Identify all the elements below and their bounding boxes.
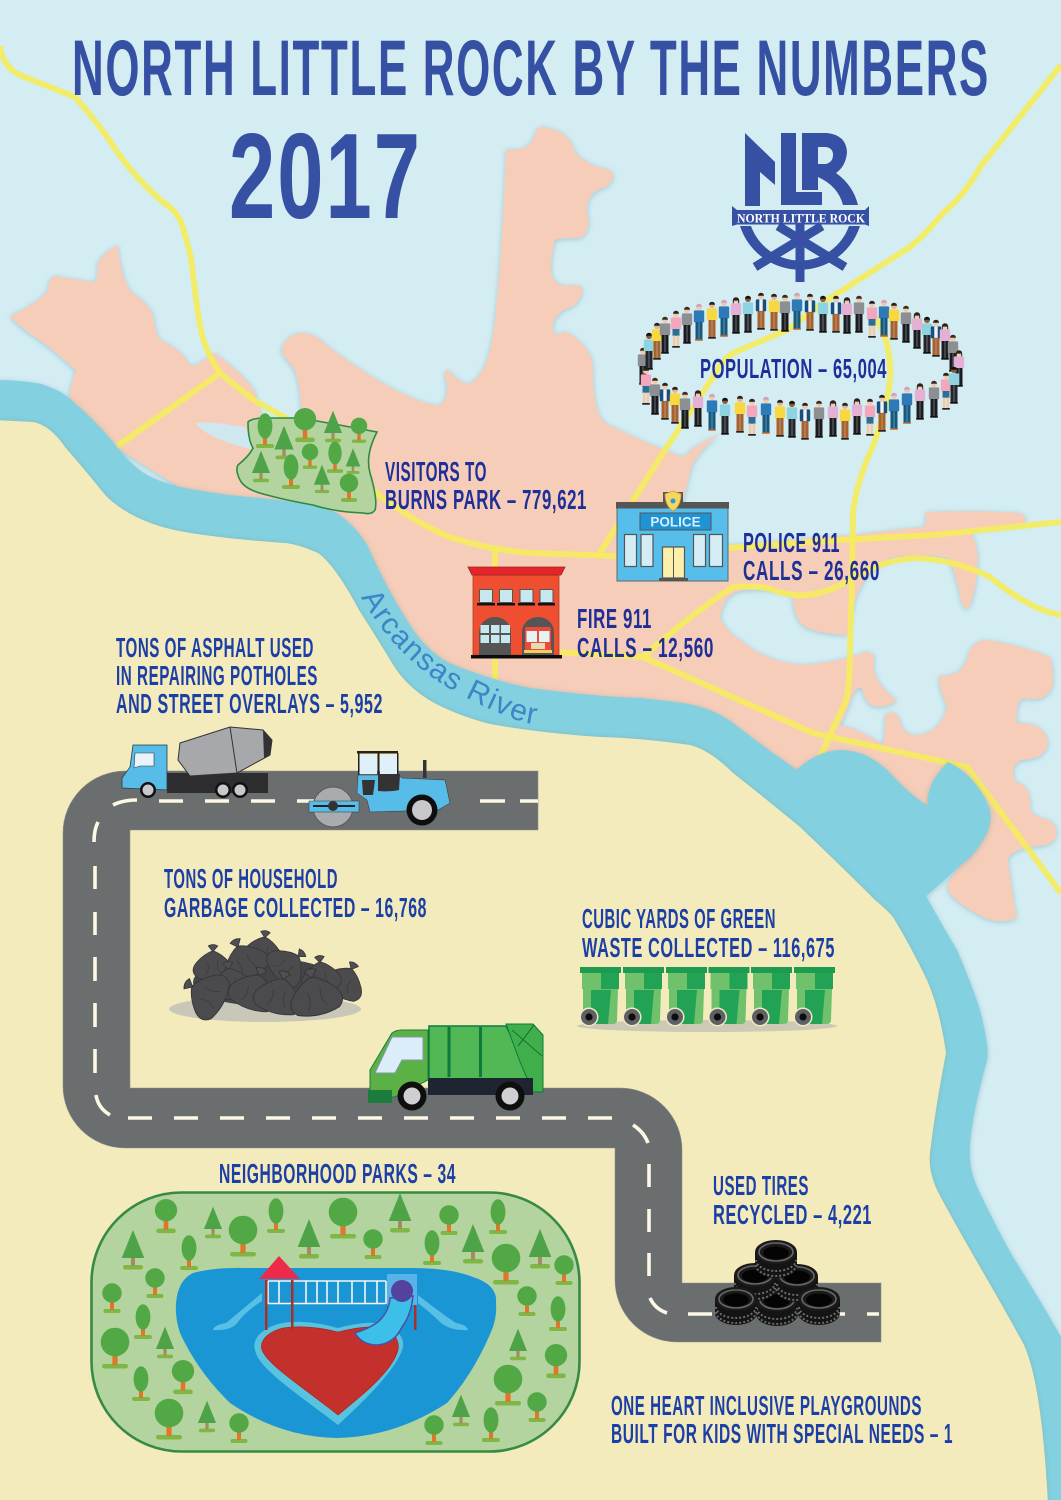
park trees bbox=[101, 1193, 574, 1445]
text: one heart playgrounds bbox=[611, 1390, 953, 1449]
road lane dashes bbox=[94, 800, 879, 1314]
text: visitors to Burns Park bbox=[385, 456, 587, 515]
text: used tires: RECYCLED – 4,221 bbox=[713, 1199, 872, 1230]
icon: green waste bins bbox=[577, 967, 837, 1032]
text: tons of asphalt: IN REPAIRING POTHOLES bbox=[116, 660, 318, 691]
text: police 911 calls: CALLS – 26,660 bbox=[743, 555, 880, 586]
red heart bbox=[261, 1327, 398, 1415]
map: North Little Rock land area bbox=[10, 126, 1057, 921]
icon: road roller bbox=[309, 751, 450, 827]
text: tons of asphalt bbox=[116, 632, 383, 719]
text: green waste bbox=[582, 903, 835, 963]
text: household garbage bbox=[164, 863, 427, 923]
logo: North Little Rock bbox=[732, 133, 869, 282]
text: police 911 calls bbox=[743, 527, 880, 586]
text: green waste: WASTE COLLECTED – 116,675 bbox=[582, 932, 835, 963]
text: used tires bbox=[713, 1170, 872, 1230]
text: population: POPULATION – 65,004 bbox=[700, 353, 887, 384]
text: fire 911 calls: FIRE 911 bbox=[577, 603, 652, 634]
map: small inlet bbox=[196, 423, 255, 450]
text: household garbage: TONS OF HOUSEHOLD bbox=[164, 863, 338, 894]
text: used tires: USED TIRES bbox=[713, 1170, 809, 1201]
icon: stack of tires bbox=[715, 1240, 840, 1326]
heart outline bbox=[254, 1322, 403, 1425]
playground structure bbox=[213, 1256, 468, 1345]
river label: Arcansas River bbox=[361, 594, 538, 724]
icon: police station bbox=[616, 491, 729, 581]
icon: Burns Park bbox=[237, 408, 377, 514]
logo: North Little Rock: NORTH LITTLE ROCK bbox=[737, 210, 866, 226]
blue play surface bbox=[176, 1268, 496, 1438]
text: visitors to Burns Park: BURNS PARK – 779,621 bbox=[385, 484, 587, 515]
winding road bbox=[63, 771, 881, 1342]
year: 2017 bbox=[229, 108, 422, 244]
people ring: population bbox=[638, 293, 964, 440]
icon: cement mixer truck bbox=[122, 727, 272, 798]
icon: pile of garbage bags bbox=[169, 928, 373, 1025]
icon: police station: POLICE bbox=[650, 514, 701, 530]
text: household garbage: GARBAGE COLLECTED – 16,768 bbox=[164, 892, 427, 923]
icon: fire station bbox=[468, 567, 565, 658]
map: yellow roads bbox=[0, 46, 1061, 893]
text: police 911 calls: POLICE 911 bbox=[743, 527, 840, 558]
text: neighborhood parks: NEIGHBORHOOD PARKS – 34 bbox=[219, 1158, 456, 1189]
text: tons of asphalt: AND STREET OVERLAYS – 5,952 bbox=[116, 688, 383, 719]
text: visitors to Burns Park: VISITORS TO bbox=[385, 456, 487, 487]
panel: neighborhood park bbox=[92, 1192, 580, 1452]
text: green waste: CUBIC YARDS OF GREEN bbox=[582, 903, 776, 934]
icon: garbage truck bbox=[368, 1024, 543, 1110]
text: fire 911 calls: CALLS – 12,560 bbox=[577, 632, 714, 663]
map: beige south bank bbox=[0, 420, 1048, 1500]
text: tons of asphalt: TONS OF ASPHALT USED bbox=[116, 632, 314, 663]
text: fire 911 calls bbox=[577, 603, 714, 663]
map: Arkansas River bbox=[0, 380, 1061, 1500]
